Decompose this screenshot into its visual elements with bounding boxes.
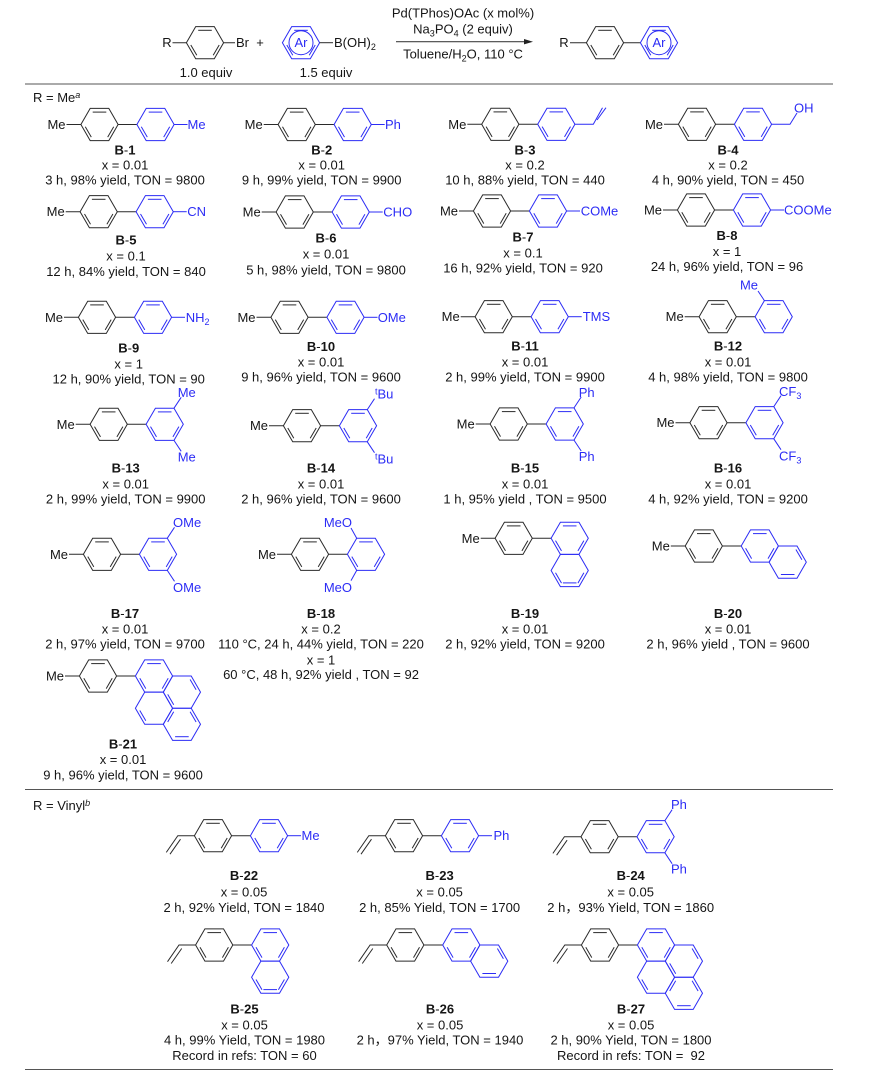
compound B-13: Me	[178, 450, 196, 464]
compound B-12: x = 0.01	[705, 354, 751, 370]
compound B-27	[550, 929, 712, 1063]
compound B-27: 2 h, 90% Yield, TON = 1800	[550, 1032, 712, 1048]
compound B-24	[547, 797, 714, 915]
compound B-11: x = 0.01	[502, 354, 548, 370]
compound B-5: x = 0.1	[106, 248, 146, 264]
compound B-16: 4 h, 92% yield, TON = 9200	[648, 492, 808, 506]
compound B-3: 10 h, 88% yield, TON = 440	[445, 172, 605, 188]
compound B-13: Me	[178, 385, 196, 400]
compound B-19: B-19	[511, 606, 539, 621]
compound B-8: 24 h, 96% yield, TON = 96	[651, 259, 803, 274]
compound B-17: x = 0.01	[102, 622, 148, 636]
compound B-4: B-4	[718, 142, 739, 158]
compound B-10: x = 0.01	[298, 354, 344, 370]
compound B-3: B-3	[515, 142, 535, 158]
compound B-14: x = 0.01	[298, 476, 344, 492]
compound B-4	[645, 100, 814, 188]
compound B-5: 12 h, 84% yield, TON = 840	[46, 264, 206, 279]
aryl bromide reactant: Br	[236, 35, 250, 50]
compound B-12: Me	[666, 309, 684, 324]
compound B-21: 9 h, 96% yield, TON = 9600	[43, 768, 203, 782]
compound B-12: 4 h, 98% yield, TON = 9800	[648, 370, 808, 384]
compound B-17: B-17	[111, 606, 139, 621]
compound B-11: 2 h, 99% yield, TON = 9900	[445, 370, 605, 384]
compound B-2	[242, 108, 401, 188]
compound B-15: 1 h, 95% yield , TON = 9500	[443, 492, 607, 506]
compound B-12: B-12	[714, 338, 742, 354]
compound B-14	[241, 386, 401, 506]
compound B-13: Me	[57, 417, 75, 432]
compound B-19: 2 h, 92% yield, TON = 9200	[445, 636, 605, 652]
compound B-4: Me	[645, 117, 663, 132]
aryl bromide reactant	[162, 27, 250, 80]
compound B-18	[218, 515, 424, 682]
compound B-25: 4 h, 99% Yield, TON = 1980	[164, 1032, 325, 1048]
compound B-1: 3 h, 98% yield, TON = 9800	[45, 172, 205, 188]
compound B-16: 3	[796, 456, 801, 466]
compound B-15	[443, 385, 607, 506]
compound B-6: CHO	[383, 204, 412, 220]
compound B-16: 3	[796, 391, 801, 401]
compound B-22: B-22	[230, 868, 258, 883]
boronic acid reactant: B(OH)	[334, 35, 371, 50]
compound B-7: Me	[440, 204, 458, 218]
compound B-8: Me	[644, 202, 662, 218]
compound B-14: B-14	[307, 460, 336, 476]
compound B-13: x = 0.01	[102, 476, 149, 492]
compound B-15: x = 0.01	[502, 476, 548, 492]
compound B-20: x = 0.01	[705, 622, 751, 636]
compound B-18: 110 °C, 24 h, 44% yield, TON = 220	[218, 636, 424, 652]
compound B-14: 2 h, 96% yield, TON = 9600	[241, 492, 401, 506]
reaction conditions: 2	[462, 54, 467, 64]
compound B-21	[43, 660, 203, 782]
compound B-4: x = 0.2	[708, 158, 748, 172]
compound B-14: Bu	[378, 452, 393, 466]
compound B-17	[45, 515, 205, 652]
reaction conditions: Pd(TPhos)OAc (x mol%)	[392, 6, 534, 20]
compound B-17: OMe	[173, 580, 201, 595]
reaction conditions: PO	[435, 22, 454, 36]
compound B-22: x = 0.05	[221, 884, 267, 900]
compound B-3: Me	[448, 117, 466, 132]
compound B-25: B-25	[230, 1002, 259, 1016]
compound B-24: B-24	[617, 868, 646, 883]
reaction conditions: O, 110 °C	[467, 46, 523, 62]
compound B-7	[440, 195, 618, 276]
compound B-8	[644, 194, 832, 274]
compound B-27: Record in refs: TON = 92	[557, 1048, 705, 1063]
boronic acid reactant	[282, 27, 376, 80]
compound B-6: x = 0.01	[303, 246, 349, 262]
reaction conditions: 3	[430, 28, 435, 38]
compound B-22: 2 h, 92% Yield, TON = 1840	[163, 900, 325, 915]
compound B-3: x = 0.2	[505, 158, 545, 172]
compound B-20	[646, 530, 810, 652]
compound B-14: Me	[250, 418, 268, 433]
compound B-15: B-15	[511, 460, 539, 476]
reaction conditions: (2 equiv)	[459, 22, 513, 36]
compound B-12: Me	[740, 278, 758, 292]
reaction conditions: Toluene/H	[403, 46, 462, 62]
section heading: R = Me: a	[75, 90, 80, 100]
compound B-23: Ph	[494, 828, 509, 843]
compound B-16: CF	[779, 384, 796, 399]
compound B-13	[46, 385, 205, 506]
aryl bromide reactant: R	[162, 35, 172, 50]
compound B-12	[648, 278, 808, 384]
compound B-21: Me	[46, 668, 64, 684]
section heading: R = Vinyl: b	[85, 798, 90, 808]
compound B-9: Me	[45, 310, 63, 325]
biaryl product	[559, 27, 678, 59]
compound B-11: TMS	[583, 309, 610, 324]
compound B-21: x = 0.01	[100, 752, 146, 767]
compound B-10: 9 h, 96% yield, TON = 9600	[241, 370, 401, 384]
compound B-16: CF	[779, 448, 796, 464]
compound B-1: x = 0.01	[102, 158, 148, 172]
compound B-11: B-11	[511, 338, 539, 354]
compound B-1: B-1	[115, 142, 135, 158]
compound B-17: OMe	[173, 515, 201, 530]
compound B-7: B-7	[513, 230, 533, 244]
compound B-15: Ph	[579, 449, 595, 464]
compound B-7: x = 0.1	[503, 246, 543, 260]
compound B-6: 5 h, 98% yield, TON = 9800	[246, 262, 406, 278]
compound B-8: COOMe	[784, 202, 832, 218]
section heading: R = Vinyl: R = Vinyl	[33, 798, 85, 813]
compound B-19: Me	[462, 531, 480, 546]
compound B-17: Me	[50, 547, 68, 562]
reaction scheme	[162, 6, 678, 80]
compound B-26: x = 0.05	[417, 1018, 463, 1032]
compound B-22: Me	[302, 828, 320, 843]
boronic acid reactant: Ar	[294, 35, 308, 50]
compound B-24: 2 h，93% Yield, TON = 1860	[547, 900, 714, 915]
compound B-18: Me	[258, 547, 276, 562]
compound B-5: B-5	[116, 232, 136, 248]
compound B-27: B-27	[617, 1002, 645, 1016]
compound B-10	[237, 301, 406, 384]
compound B-8: B-8	[717, 228, 737, 243]
compound B-1	[45, 108, 206, 188]
compound B-1: Me	[188, 117, 206, 132]
reaction conditions: 4	[454, 28, 459, 38]
compound B-24: Ph	[671, 862, 687, 876]
compound B-15: Me	[457, 416, 475, 432]
compound B-20: 2 h, 96% yield , TON = 9600	[646, 636, 810, 652]
compound B-3	[445, 108, 606, 188]
compound B-17: 2 h, 97% yield, TON = 9700	[45, 636, 205, 652]
compound B-11	[442, 301, 610, 384]
compound B-5: Me	[47, 204, 65, 219]
compound B-10: B-10	[307, 339, 335, 354]
compound B-16: x = 0.01	[705, 476, 751, 492]
compound B-9: 2	[204, 317, 209, 327]
compound B-9: B-9	[118, 340, 139, 356]
compound B-2: 9 h, 99% yield, TON = 9900	[242, 172, 401, 188]
compound B-5: CN	[187, 204, 206, 219]
compound B-24: x = 0.05	[607, 884, 654, 900]
compound B-25: Record in refs: TON = 60	[172, 1048, 317, 1063]
compound B-24: Ph	[671, 797, 687, 812]
compound B-27: x = 0.05	[608, 1018, 654, 1032]
compound B-6: B-6	[316, 230, 336, 246]
compound B-19: x = 0.01	[502, 622, 548, 636]
compound B-1: Me	[47, 117, 66, 132]
compound B-23	[357, 820, 520, 915]
biaryl product: R	[559, 35, 569, 50]
compound B-14: t	[375, 386, 378, 396]
compound B-25	[164, 929, 325, 1063]
arrow	[396, 39, 533, 44]
compound B-23: B-23	[425, 868, 454, 883]
compound B-26	[357, 929, 523, 1048]
compound B-23: x = 0.05	[416, 884, 463, 900]
compound B-9: 12 h, 90% yield, TON = 90	[53, 372, 205, 386]
compound B-16: B-16	[714, 460, 742, 476]
compound B-13: 2 h, 99% yield, TON = 9900	[46, 492, 205, 506]
compound B-20: Me	[652, 538, 670, 554]
compound B-13: B-13	[112, 460, 140, 476]
compound B-18: x = 1	[307, 652, 335, 668]
reaction conditions: Na	[413, 22, 430, 36]
section heading: R = Me: R = Me	[33, 90, 75, 105]
compound B-4: OH	[794, 100, 814, 116]
reaction conditions	[392, 6, 534, 64]
compound B-21: B-21	[109, 736, 137, 752]
compound B-16: Me	[656, 415, 674, 430]
compound B-9: x = 1	[114, 356, 143, 372]
compound B-6: Me	[243, 204, 261, 220]
compound B-10: OMe	[378, 310, 406, 325]
compound B-23: 2 h, 85% Yield, TON = 1700	[359, 900, 520, 915]
compound B-5	[46, 196, 206, 279]
plus sign: +	[256, 35, 264, 50]
compound B-2: x = 0.01	[298, 158, 345, 172]
compound B-18: MeO	[324, 580, 352, 595]
compound B-25: x = 0.05	[221, 1018, 268, 1032]
biaryl product: Ar	[652, 35, 666, 50]
compound B-20: B-20	[714, 606, 742, 621]
compound B-18: x = 0.2	[301, 622, 341, 636]
compound B-2: Ph	[385, 117, 401, 132]
compound B-9	[45, 301, 209, 386]
compound B-7: COMe	[581, 204, 618, 218]
compound B-14: t	[375, 452, 378, 462]
compound B-22	[163, 820, 325, 915]
compound B-6	[243, 196, 412, 278]
compound B-11: Me	[442, 309, 460, 324]
compound B-10: Me	[237, 310, 256, 325]
compound B-15: Ph	[579, 385, 595, 400]
boronic acid reactant: 1.5 equiv	[300, 65, 353, 80]
compound B-4: 4 h, 90% yield, TON = 450	[652, 172, 804, 188]
compound B-7: 16 h, 92% yield, TON = 920	[443, 260, 603, 276]
compound B-9: NH	[186, 310, 204, 325]
compound B-18: 60 °C, 48 h, 92% yield , TON = 92	[223, 667, 419, 682]
compound B-19	[445, 522, 605, 652]
compound B-18: MeO	[324, 515, 352, 530]
compound B-26: B-26	[426, 1002, 454, 1016]
compound B-14: Bu	[378, 386, 393, 402]
compound B-16	[648, 384, 808, 506]
compound B-26: 2 h，97% Yield, TON = 1940	[357, 1032, 523, 1048]
compound B-18: B-18	[307, 606, 335, 621]
compound B-2: Me	[245, 117, 263, 132]
boronic acid reactant: 2	[371, 42, 376, 52]
aryl bromide reactant: 1.0 equiv	[180, 65, 233, 80]
compound B-2: B-2	[311, 142, 332, 158]
compound B-8: x = 1	[713, 244, 741, 259]
